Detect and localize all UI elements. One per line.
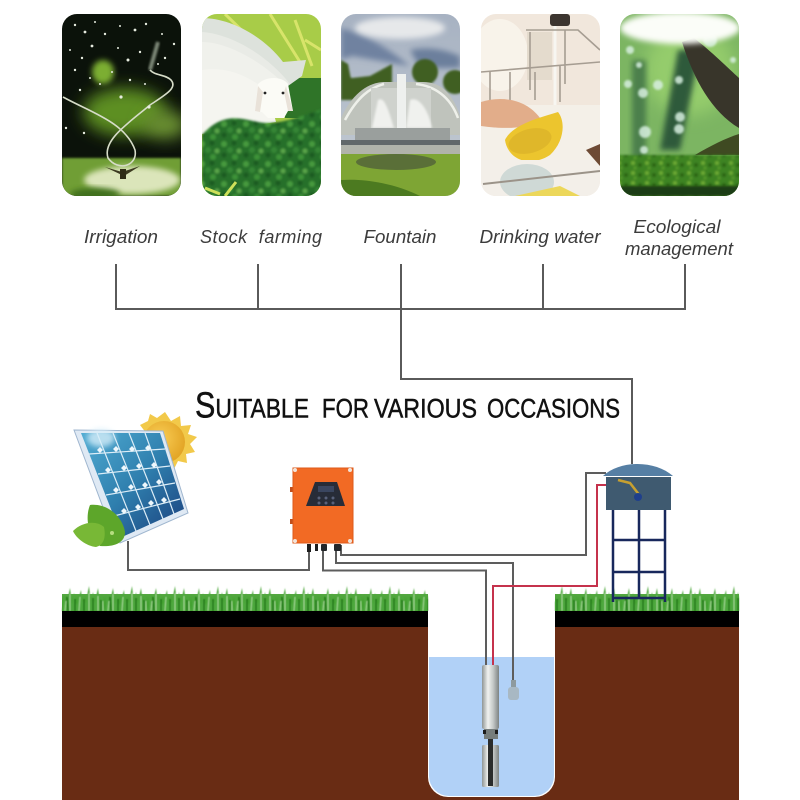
text: ecological management label bbox=[625, 217, 734, 259]
text: ecological management label: management bbox=[625, 239, 734, 259]
wire: controller to tank float switch bbox=[341, 473, 606, 555]
ground: soil, topsoil band and grass bbox=[62, 585, 739, 800]
icon: water level sensor bbox=[508, 680, 519, 700]
icon: solar panel bbox=[74, 429, 188, 543]
well: water-filled borehole bbox=[428, 611, 555, 797]
wire: controller to pump bbox=[323, 545, 486, 665]
photo: irrigation sprinkler bbox=[62, 14, 187, 200]
photo: fountain bbox=[341, 14, 467, 196]
heading: suitable for various occasions bbox=[195, 384, 620, 426]
heading: suitable for various occasions: SUITABLE bbox=[195, 384, 309, 426]
text: drinking water label: Drinking water bbox=[480, 227, 602, 247]
text: stock farming label: Stock farming bbox=[200, 227, 322, 247]
icon: sun bbox=[140, 412, 197, 469]
photo: ecological management forest bbox=[620, 14, 739, 196]
photo: stock farming sheep bbox=[202, 14, 325, 200]
icon: orange solar pump controller bbox=[290, 468, 353, 552]
wire: solar panel to controller bbox=[128, 541, 309, 570]
wire: red pump cable to tank bbox=[493, 485, 607, 665]
text: ecological management label: Ecological bbox=[634, 217, 722, 237]
wire: controller to water level sensor bbox=[336, 545, 513, 682]
heading: suitable for various occasions: VARIOUS bbox=[374, 394, 477, 424]
text: fountain label: Fountain bbox=[364, 227, 436, 247]
icon: elevated water tank bbox=[603, 464, 673, 602]
text: irrigation label: Irrigation bbox=[84, 227, 158, 247]
heading: suitable for various occasions: FOR bbox=[322, 394, 369, 424]
panel: application photos bbox=[62, 12, 745, 201]
icon: submersible pump bbox=[482, 665, 499, 787]
connector: bracket linking applications to water tank bbox=[116, 264, 685, 464]
photo: drinking water dish rack bbox=[472, 14, 600, 200]
icon: green leaves bbox=[73, 505, 125, 547]
heading: suitable for various occasions: OCCASIONS bbox=[487, 394, 620, 424]
